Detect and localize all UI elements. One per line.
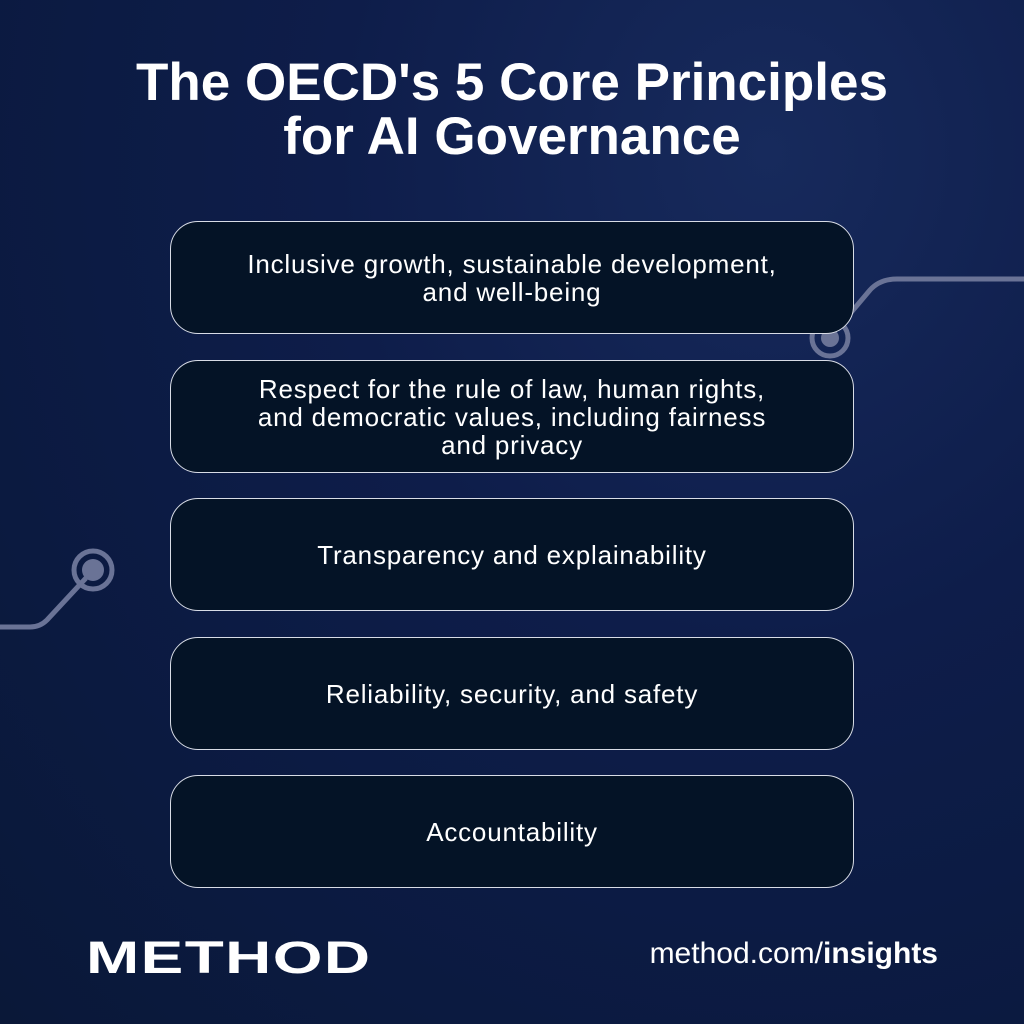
box 3: Transparency and explainability: [317, 540, 707, 570]
box 2: [170, 360, 854, 473]
logo: METHOD: [86, 932, 371, 983]
box 2: and privacy: [441, 430, 583, 460]
box 1: and well-being: [423, 276, 601, 306]
box 1: [170, 221, 854, 334]
title: [136, 53, 888, 166]
box 4: [170, 637, 854, 750]
box 3: [170, 498, 854, 611]
title: for AI Governance: [283, 107, 741, 166]
title: The OECD's 5 Core Principles: [136, 53, 888, 112]
box 2: Respect for the rule of law, human rights,: [259, 374, 765, 404]
box 4: Reliability, security, and safety: [326, 678, 698, 708]
box 2: and democratic values, including fairness: [258, 402, 766, 432]
box 5: Accountability: [426, 816, 598, 846]
url: method.com/insights: [650, 937, 938, 970]
box 5: [170, 775, 854, 888]
box 1: Inclusive growth, sustainable development,: [247, 248, 777, 278]
